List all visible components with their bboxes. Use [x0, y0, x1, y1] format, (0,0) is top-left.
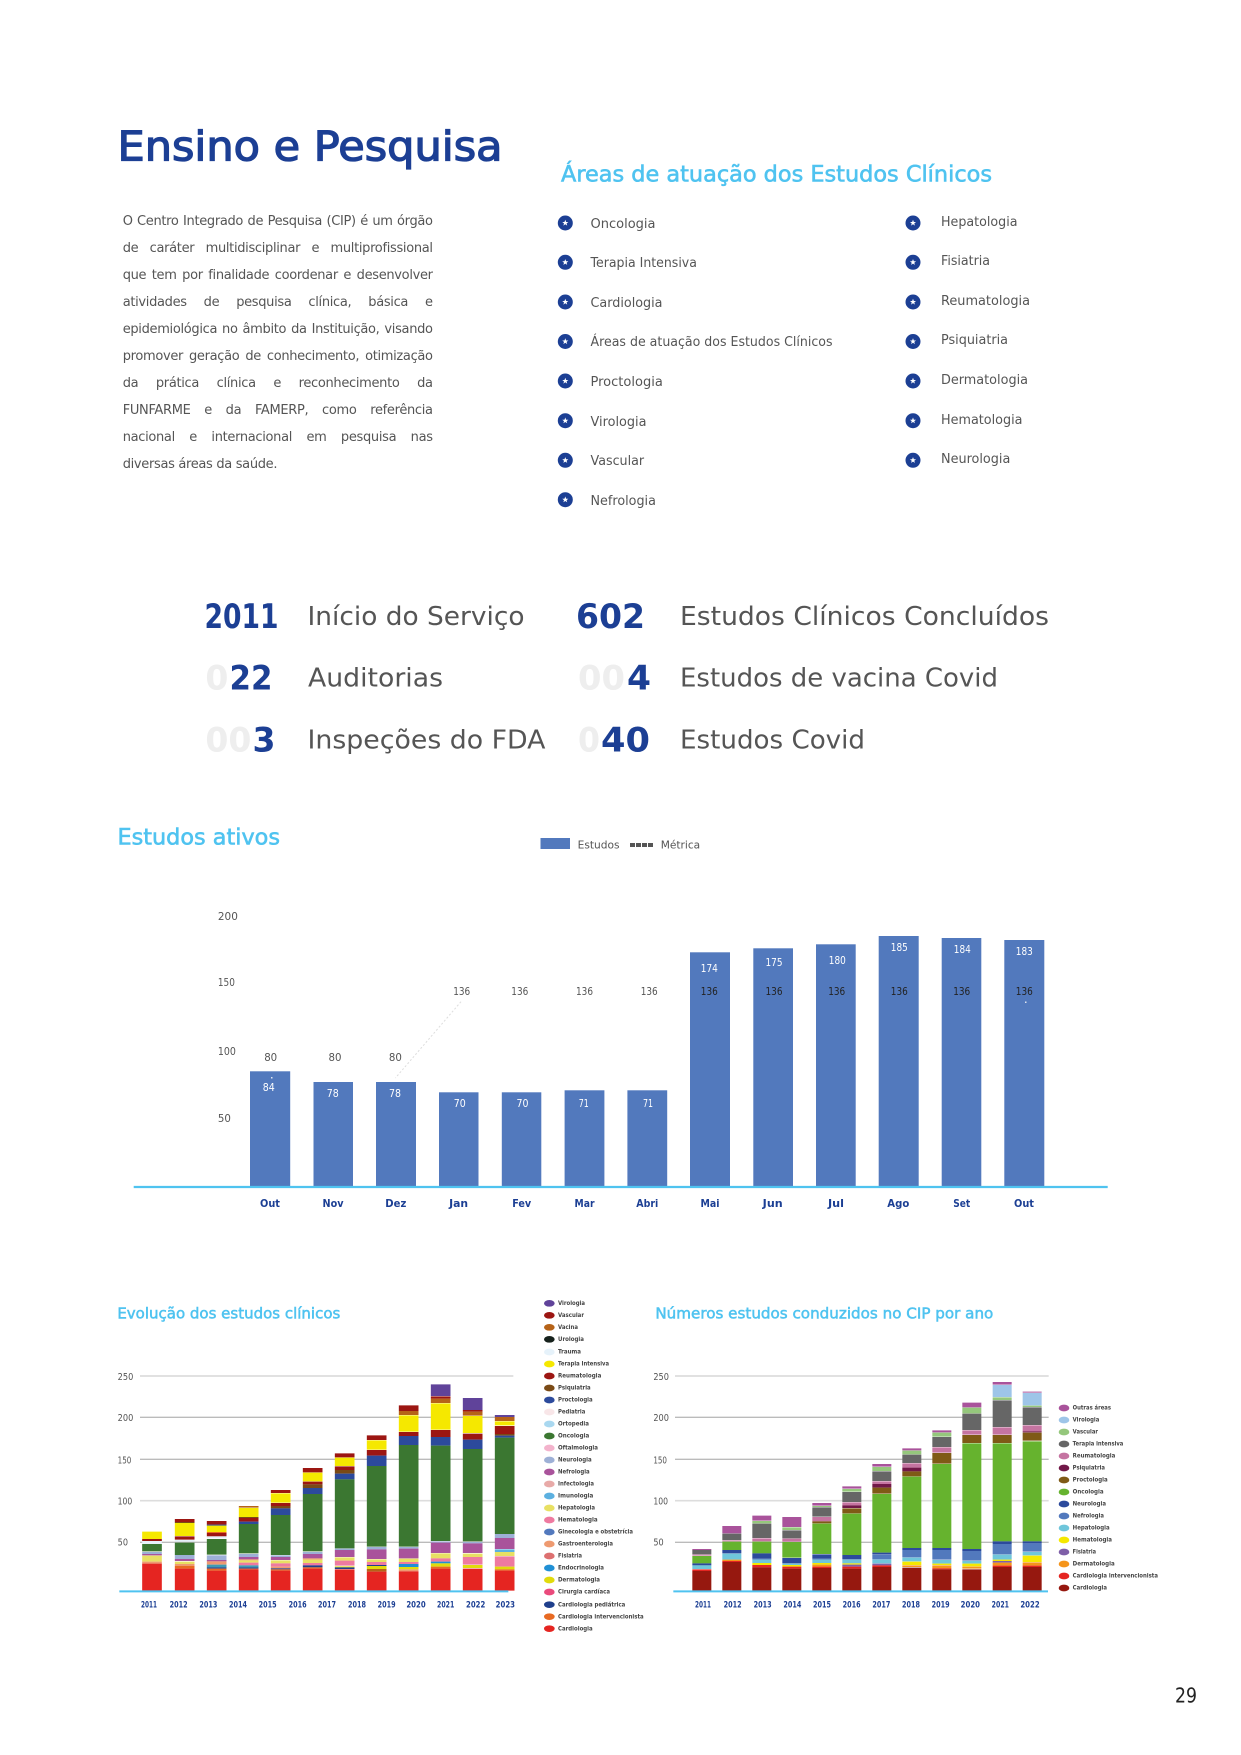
list: right column: Dermatologia [941, 373, 1028, 388]
page number: 29 [1175, 1684, 1197, 1708]
heading: evolucao: Evolução dos estudos clínicos [117, 1304, 340, 1322]
legend: evolucao: Vacina [558, 1324, 578, 1331]
metric values: 136 [576, 985, 593, 998]
list: left column: Vascular [590, 454, 645, 469]
list: right column: Hematologia [941, 413, 1022, 428]
legend: evolucao: Trauma [558, 1349, 581, 1356]
legend: numeros estudos: Cardiologia [1073, 1585, 1107, 1592]
legend: evolucao: Proctologia [558, 1397, 593, 1404]
legend: numeros estudos: Psiquiatria [1073, 1465, 1105, 1472]
text block: intro: nacional e internacional em pesquisa nas [123, 430, 433, 445]
legend: evolucao: Neurologia [558, 1457, 592, 1464]
month labels: Fev [512, 1197, 532, 1210]
legend: numeros estudos: Nefrologia [1073, 1513, 1104, 1520]
legend: evolucao: Oncologia [558, 1433, 589, 1440]
stat: 2011 inicio do servico: 2011 [204, 597, 278, 636]
legend: Métrica [661, 839, 700, 852]
year labels: 2016 [843, 1601, 861, 1611]
text block: intro: de caráter multidisciplinar e multiprofissional [123, 241, 433, 256]
stat: 040 estudos covid: 40 [601, 720, 650, 760]
year labels: 2022 [466, 1601, 485, 1611]
y axis labels: 100 [653, 1496, 668, 1507]
legend: numeros estudos: Hepatologia [1073, 1525, 1110, 1532]
legend: evolucao: Ortopedia [558, 1421, 589, 1428]
metric values: 136 [453, 985, 470, 998]
year labels: 2015 [813, 1601, 831, 1611]
metric values: 80 [328, 1051, 342, 1064]
metric values: 136 [766, 985, 782, 998]
title: Ensino e Pesquisa [118, 122, 502, 170]
legend: numeros estudos: Hematologia [1073, 1537, 1112, 1544]
month labels: Jul [827, 1197, 844, 1210]
text block: intro: atividades de pesquisa clínica, básica e [123, 295, 433, 310]
stat: 003 inspecoes do FDA: Inspeções do FDA [308, 726, 546, 756]
legend: numeros estudos [1058, 1404, 1158, 1592]
y axis labels [218, 910, 238, 1125]
list: left column: Terapia Intensiva [590, 256, 697, 271]
stat: 003 inspecoes do FDA: 00 [205, 720, 251, 760]
list: right column: Fisiatria [941, 254, 990, 269]
legend: evolucao: Vascular [558, 1312, 585, 1319]
stat: 040 estudos covid: Estudos Covid [680, 726, 865, 756]
stacked bars [702, 1382, 1032, 1591]
bar values [263, 941, 1033, 1110]
stat: 004 estudos de vacina covid: Estudos de vacina Covid [680, 664, 998, 694]
bar values: 174 [701, 962, 718, 975]
legend: evolucao: Virologia [558, 1300, 585, 1307]
legend: evolucao: Imunologia [558, 1493, 593, 1500]
legend: evolucao: Reumatologia [558, 1373, 601, 1380]
legend: numeros estudos: Neurologia [1073, 1501, 1106, 1508]
year labels: 2020 [961, 1601, 980, 1611]
legend: evolucao: Gastroenterologia [558, 1541, 613, 1548]
year labels: 2022 [1020, 1601, 1040, 1611]
stat: 022 auditorias: 0 [205, 658, 228, 698]
legend: evolucao: Endocrinologia [558, 1565, 604, 1572]
heading: estudos ativos: Estudos ativos [118, 826, 280, 851]
legend: numeros estudos: Outras áreas [1073, 1404, 1111, 1412]
year labels: 2012 [724, 1601, 742, 1611]
legend: evolucao: Nefrologia [558, 1469, 590, 1476]
panel: estudos ativos [118, 826, 1108, 1210]
legend: evolucao: Dermatologia [558, 1577, 600, 1584]
list: left column [558, 216, 833, 509]
list: left column: Oncologia [590, 217, 656, 232]
month labels: Out [1014, 1197, 1034, 1210]
bar values: 78 [327, 1087, 339, 1100]
heading: areas de atuacao: Áreas de atuação dos Estudos Clínicos [561, 162, 992, 188]
legend: evolucao: Cardiologia [558, 1625, 593, 1632]
month labels: Dez [385, 1197, 406, 1210]
y axis labels: 200 [118, 1413, 133, 1424]
stat: 040 estudos covid [578, 720, 865, 760]
bar values: 184 [954, 943, 971, 956]
y axis labels: 150 [653, 1455, 667, 1466]
month labels: Set [953, 1197, 970, 1210]
text block: intro: FUNFARME e da FAMERP, como referência [123, 403, 433, 418]
heading: numeros estudos: Números estudos conduzidos no CIP por ano [655, 1304, 993, 1322]
legend: numeros estudos: Vascular [1073, 1429, 1099, 1436]
stat: 022 auditorias: 22 [230, 658, 272, 698]
month labels: Jan [448, 1197, 468, 1210]
metric values: 136 [891, 985, 908, 998]
stat: 003 inspecoes do FDA [205, 720, 546, 760]
axis line [119, 1588, 508, 1594]
legend: numeros estudos: Proctologia [1073, 1477, 1108, 1484]
legend: evolucao: Cirurgia cardíaca [558, 1588, 610, 1596]
stat: 2011 inicio do servico [204, 597, 524, 636]
metric values: 136 [641, 985, 658, 998]
stat: 004 estudos de vacina covid: 4 [627, 658, 651, 698]
axis line [673, 1588, 1048, 1594]
metric values: 136 [1016, 985, 1033, 998]
y axis labels: 250 [653, 1372, 669, 1383]
stat: 003 inspecoes do FDA: 3 [252, 720, 276, 760]
stat: 022 auditorias [205, 658, 443, 698]
text block: intro: diversas áreas da saúde. [123, 457, 277, 472]
list: left column: Cardiologia [590, 296, 662, 311]
year labels: 2014 [783, 1601, 801, 1611]
stat: 602 estudos clinicos concluidos: 602 [576, 597, 645, 636]
legend: numeros estudos: Terapia intensiva [1073, 1441, 1123, 1448]
year labels: 2016 [289, 1601, 307, 1611]
y axis labels: 100 [118, 1496, 132, 1507]
legend: evolucao: Infectologia [558, 1481, 594, 1488]
year labels: 2021 [992, 1601, 1009, 1611]
year labels [695, 1601, 1040, 1611]
legend: numeros estudos: Oncologia [1073, 1489, 1104, 1496]
metric values: 136 [828, 985, 845, 998]
year labels: 2013 [199, 1601, 217, 1611]
year labels: 2021 [437, 1601, 454, 1611]
month labels: Jun [762, 1197, 783, 1210]
month labels: Nov [322, 1197, 344, 1210]
month labels [260, 1197, 1034, 1210]
text block: intro: promover geração de conhecimento, otimização [123, 349, 433, 364]
legend: numeros estudos: Fisiatria [1073, 1549, 1096, 1556]
year labels: 2018 [902, 1601, 920, 1611]
stat: 004 estudos de vacina covid [578, 658, 998, 698]
legend: evolucao: Psiquiatria [558, 1385, 591, 1392]
metric values [264, 985, 1033, 1064]
bars [250, 936, 1044, 1186]
y axis labels: 50 [218, 1112, 231, 1125]
list: left column: Nefrologia [590, 494, 656, 509]
legend: numeros estudos: Cardiologia intervencionista [1073, 1573, 1158, 1580]
metric values: 80 [389, 1051, 402, 1064]
year labels: 2013 [754, 1601, 772, 1611]
list: left column: Proctologia [590, 375, 663, 390]
legend: evolucao: Hepatologia [558, 1505, 595, 1512]
stat: 602 estudos clinicos concluidos: Estudos Clínicos Concluídos [680, 602, 1049, 632]
legend: evolucao: Ginecologia e obstetrícia [558, 1528, 633, 1536]
month labels: Mai [700, 1197, 720, 1210]
list: right column: Hepatologia [941, 215, 1018, 230]
bar values: 78 [389, 1087, 401, 1100]
bar values: 183 [1016, 945, 1033, 958]
legend: evolucao: Fisiatria [558, 1553, 582, 1560]
legend: evolucao [544, 1300, 644, 1632]
bar values: 70 [516, 1097, 528, 1110]
bar values: 71 [579, 1097, 589, 1110]
month labels: Ago [887, 1197, 910, 1210]
bar values: 84 [263, 1081, 275, 1094]
legend [540, 838, 700, 852]
metric values: 136 [701, 985, 718, 998]
metric values: 136 [953, 985, 970, 998]
list: right column: Neurologia [941, 452, 1010, 467]
bar values: 185 [891, 941, 908, 954]
panel: numeros estudos conduzidos [653, 1304, 1049, 1611]
legend: numeros estudos: Virologia [1073, 1417, 1099, 1424]
text block: intro: da prática clínica e reconhecimento da [123, 376, 433, 391]
metric values: 136 [511, 985, 528, 998]
text block: intro: O Centro Integrado de Pesquisa (CIP) é um órgão [123, 214, 433, 229]
y axis labels: 100 [218, 1045, 236, 1058]
legend: evolucao: Pediatria [558, 1409, 585, 1416]
y axis labels: 200 [218, 910, 238, 923]
year labels: 2019 [378, 1601, 396, 1611]
y axis labels: 250 [118, 1372, 133, 1383]
legend: numeros estudos: Dermatologia [1073, 1561, 1115, 1568]
stacked bars [152, 1384, 505, 1591]
metric values: 80 [264, 1051, 277, 1064]
y axis labels [118, 1372, 133, 1549]
text block: intro: epidemiológica no âmbito da Instituição, visando [123, 322, 433, 337]
bar values: 175 [766, 956, 782, 969]
year labels [141, 1601, 515, 1611]
year labels: 2019 [932, 1601, 950, 1611]
year labels: 2015 [259, 1601, 277, 1611]
list: right column: Reumatologia [941, 294, 1030, 309]
bar values: 70 [454, 1097, 466, 1110]
year labels: 2011 [695, 1601, 711, 1611]
month labels: Out [260, 1197, 280, 1210]
stat: 004 estudos de vacina covid: 00 [578, 658, 625, 698]
legend: Estudos [578, 839, 620, 852]
panel: key numbers [204, 597, 1049, 760]
legend: evolucao: Hematologia [558, 1517, 598, 1524]
year labels: 2018 [348, 1601, 366, 1611]
year labels: 2017 [872, 1601, 890, 1611]
year labels: 2017 [318, 1601, 336, 1611]
text block: intro: que tem por finalidade coordenar e desenvolver [123, 268, 433, 283]
year labels: 2011 [141, 1601, 157, 1611]
legend: evolucao: Oftalmologia [558, 1445, 598, 1452]
year labels: 2012 [170, 1601, 188, 1611]
stat: 2011 inicio do servico: Início do Serviço [308, 602, 524, 632]
stat: 602 estudos clinicos concluidos [576, 597, 1049, 636]
bar values: 71 [643, 1097, 653, 1110]
panel: evolucao dos estudos clinicos [117, 1304, 515, 1611]
year labels: 2014 [229, 1601, 247, 1611]
stat: 022 auditorias: Auditorias [308, 664, 443, 694]
panel: areas de atuacao [558, 160, 1030, 509]
list: left column: Áreas de atuação dos Estudos Clínicos [590, 334, 833, 350]
y axis labels [653, 1372, 669, 1549]
list: left column: Virologia [590, 415, 646, 430]
bar values: 180 [829, 954, 846, 967]
text block: intro [123, 214, 433, 472]
metric dotted line [271, 1002, 1026, 1078]
y axis labels: 150 [218, 976, 235, 989]
legend: numeros estudos: Reumatologia [1073, 1453, 1115, 1460]
year labels: 2020 [406, 1601, 426, 1611]
list: right column: Psiquiatria [941, 333, 1008, 348]
month labels: Mar [574, 1197, 595, 1210]
stat: 040 estudos covid: 0 [578, 720, 600, 760]
month labels: Abri [636, 1197, 658, 1210]
y axis labels: 150 [118, 1455, 131, 1466]
legend: evolucao: Terapia Intensiva [558, 1361, 609, 1368]
y axis labels: 200 [653, 1413, 669, 1424]
year labels: 2023 [496, 1601, 515, 1611]
y axis labels: 50 [118, 1538, 128, 1549]
legend: evolucao: Cardiologia pediátrica [558, 1600, 625, 1608]
list: right column [906, 215, 1030, 468]
y axis labels: 50 [653, 1538, 664, 1549]
legend: evolucao: Urologia [558, 1336, 584, 1343]
legend: evolucao: Cardiologia intervencionista [558, 1613, 644, 1620]
axis line [134, 1186, 1108, 1188]
